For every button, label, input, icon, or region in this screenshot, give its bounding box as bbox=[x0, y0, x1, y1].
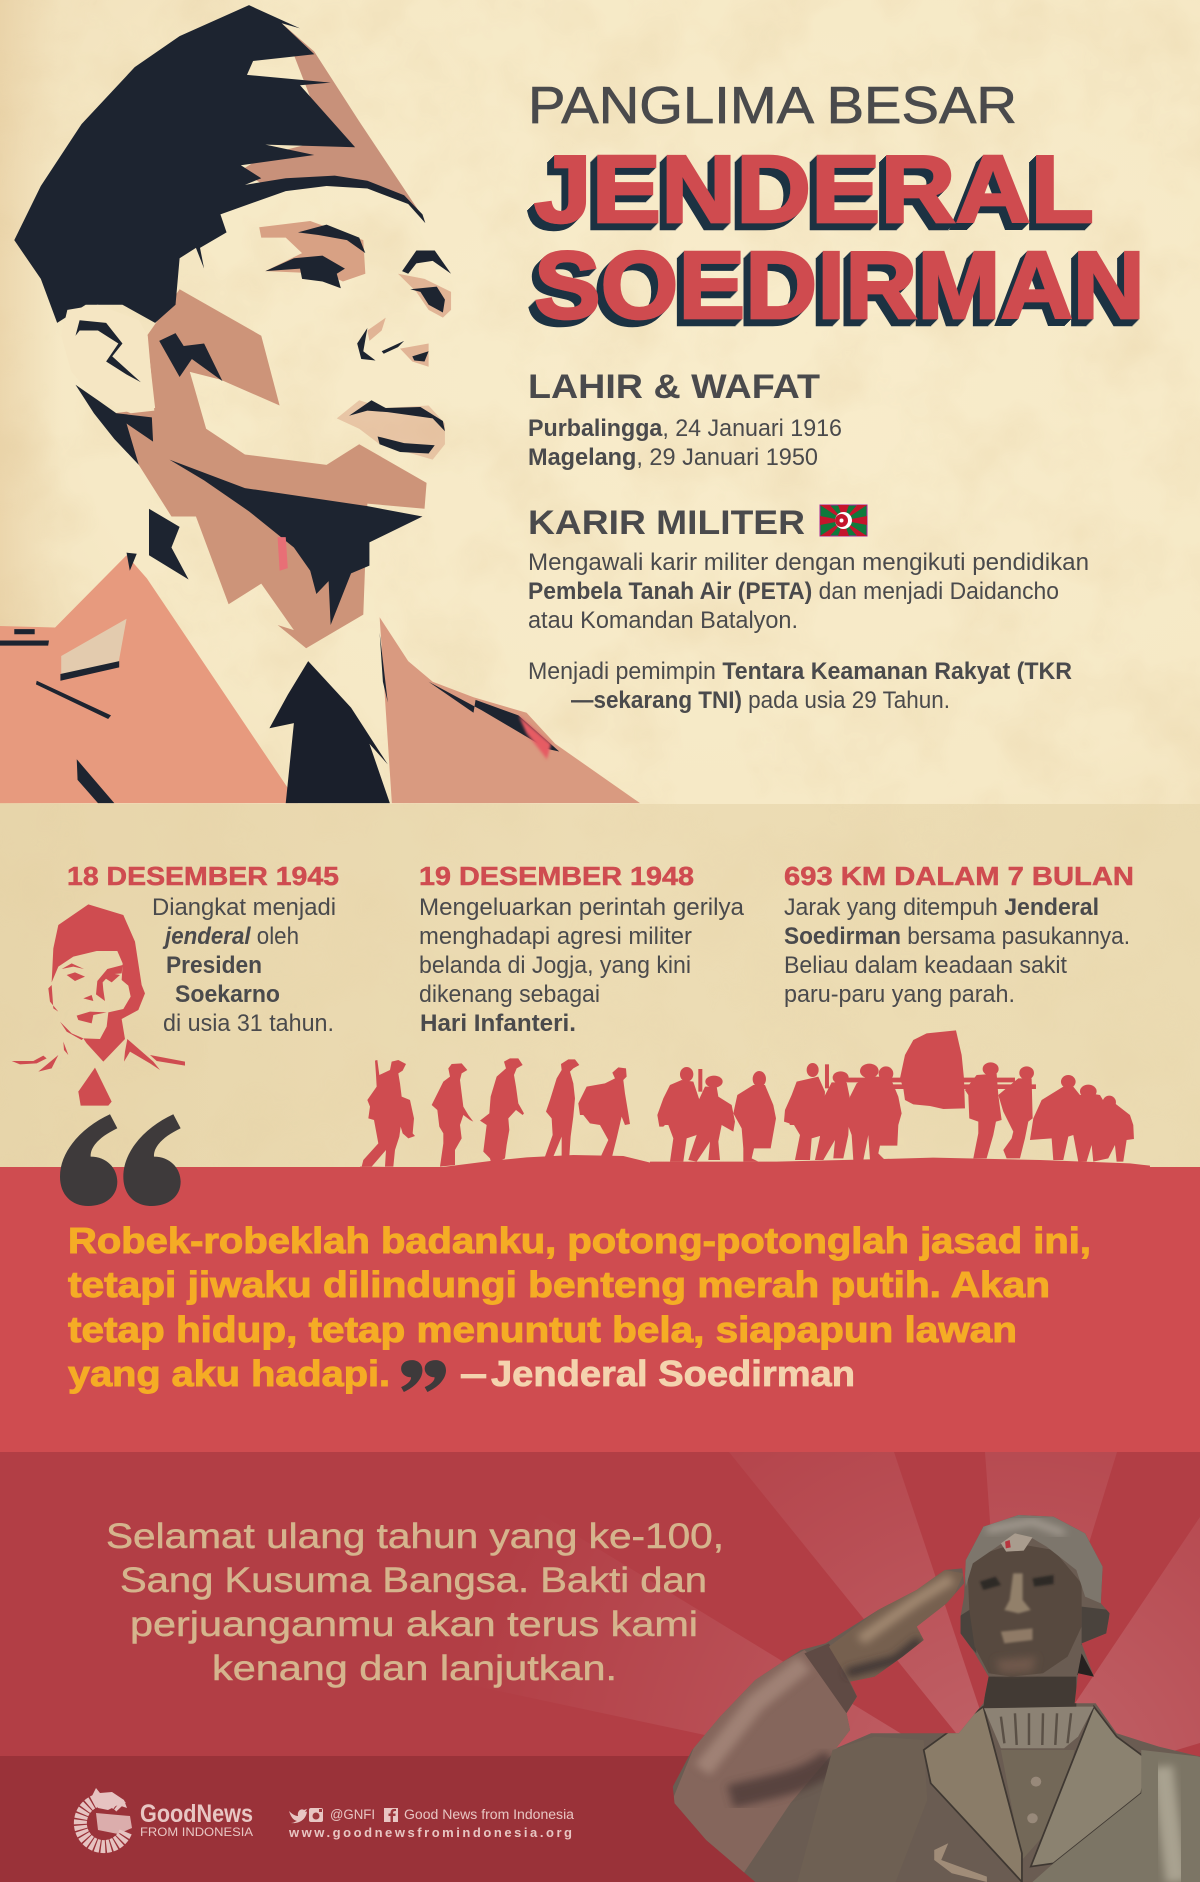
text block: military career bbox=[528, 549, 1089, 714]
heading: 19 Desember 1948: 19 DESEMBER 1948 bbox=[419, 861, 694, 891]
text block: 18 Desember bbox=[152, 894, 336, 1037]
logo text: GoodNews from Indonesia: GoodNews bbox=[140, 1800, 253, 1828]
text block: 693 km bbox=[784, 894, 1130, 1008]
website: www.goodnewsfromindonesia.org bbox=[288, 1825, 572, 1840]
text block: military career: Pembela Tanah Air (PETA) dan menjadi Daidancho bbox=[528, 578, 1059, 605]
logo text: GoodNews from Indonesia bbox=[140, 1800, 253, 1839]
text block: 18 Desember: di usia 31 tahun. bbox=[163, 1010, 334, 1037]
text block: 18 Desember: Soekarno bbox=[175, 981, 280, 1008]
greeting text: kenang dan lanjutkan. bbox=[212, 1649, 617, 1688]
quote text: yang aku hadapi. bbox=[68, 1353, 390, 1394]
icon: instagram bbox=[309, 1808, 323, 1822]
text block: 18 Desember: jenderal oleh bbox=[162, 923, 299, 950]
icon: Soekarno portrait bbox=[12, 904, 185, 1106]
quote text bbox=[68, 1220, 1091, 1394]
icon: twitter bbox=[289, 1809, 307, 1823]
heading: 18 Desember 1945: 18 DESEMBER 1945 bbox=[67, 861, 339, 891]
icon: facebook bbox=[384, 1808, 398, 1822]
text block: 19 Desember: menghadapi agresi militer bbox=[419, 923, 692, 950]
text block: 18 Desember: Diangkat menjadi bbox=[152, 894, 336, 921]
illustration: portrait of Jenderal Soedirman bbox=[0, 5, 640, 803]
quote text: tetapi jiwaku dilindungi benteng merah putih. Akan bbox=[68, 1264, 1050, 1305]
quote text: tetap hidup, tetap menuntut bela, siapapun lawan bbox=[68, 1309, 1017, 1350]
panel: footer bar bbox=[0, 1756, 1200, 1882]
greeting text: Sang Kusuma Bangsa. Bakti dan bbox=[120, 1561, 707, 1600]
text block: 693 km: Soedirman bersama pasukannya. bbox=[784, 923, 1130, 950]
social page name: Good News from Indonesia bbox=[404, 1807, 574, 1822]
title: Soedirman: SOEDIRMAN bbox=[534, 232, 1145, 339]
text block: military career: Mengawali karir militer dengan mengikuti pendidikan bbox=[528, 549, 1089, 576]
panel: timeline background bbox=[0, 804, 1200, 1168]
text block: 19 Desember: dikenang sebagai bbox=[419, 981, 600, 1008]
text block: military career: Menjadi pemimpin Tentara Keamanan Rakyat (TKR bbox=[528, 658, 1072, 685]
icon: opening quote marks bbox=[60, 1114, 181, 1206]
illustration: saluting statue bbox=[650, 1500, 1200, 1882]
icon: closing quote marks bbox=[401, 1360, 446, 1392]
panel: greeting background with rays bbox=[0, 1428, 1200, 1882]
social handle: @GNFI bbox=[330, 1807, 375, 1822]
heading: Lahir & Wafat: LAHIR & WAFAT bbox=[528, 368, 820, 406]
illustration: marching soldiers silhouette bbox=[360, 1030, 1150, 1175]
greeting text: Selamat ulang tahun yang ke-100, bbox=[106, 1517, 724, 1556]
text block: birth and death bbox=[528, 415, 842, 471]
text block: 693 km: paru-paru yang parah. bbox=[784, 981, 1015, 1008]
text block: military career: atau Komandan Batalyon. bbox=[528, 607, 798, 634]
logo text: GoodNews from Indonesia: FROM INDONESIA bbox=[140, 1825, 253, 1839]
text block: 19 Desember: Hari Infanteri. bbox=[420, 1010, 576, 1037]
panel: quote band bbox=[0, 1167, 1200, 1452]
heading: 693 km: 693 KM DALAM 7 BULAN bbox=[784, 861, 1134, 891]
heading: Karir Militer: KARIR MILITER bbox=[528, 504, 805, 542]
title: Panglima Besar: PANGLIMA BESAR bbox=[528, 77, 1017, 135]
text block: 693 km: Beliau dalam keadaan sakit bbox=[784, 952, 1067, 979]
quote attribution: Jenderal Soedirman bbox=[491, 1353, 855, 1394]
quote attribution: — bbox=[461, 1353, 486, 1394]
icon: PETA flag bbox=[820, 505, 867, 536]
logo: GoodNews garuda emblem bbox=[80, 1788, 132, 1847]
text block: birth and death: Magelang, 29 Januari 1950 bbox=[528, 444, 818, 471]
greeting text: perjuanganmu akan terus kami bbox=[130, 1605, 698, 1644]
text block: birth and death: Purbalingga, 24 Januari 1916 bbox=[528, 415, 842, 442]
text block: 19 Desember: Mengeluarkan perintah gerilya bbox=[419, 894, 745, 921]
quote text: Robek-robeklah badanku, potong-potonglah jasad ini, bbox=[68, 1220, 1091, 1261]
text block: military career: —sekarang TNI) pada usia 29 Tahun. bbox=[571, 687, 950, 714]
text block: 19 Desember: belanda di Jogja, yang kini bbox=[419, 952, 691, 979]
text block: 18 Desember: Presiden bbox=[166, 952, 262, 979]
text block: 19 Desember bbox=[419, 894, 745, 1037]
panel: top paper background bbox=[0, 0, 1200, 804]
title: Jenderal: JENDERAL bbox=[534, 136, 1094, 243]
greeting text bbox=[106, 1517, 724, 1688]
text block: 693 km: Jarak yang ditempuh Jenderal bbox=[784, 894, 1099, 921]
